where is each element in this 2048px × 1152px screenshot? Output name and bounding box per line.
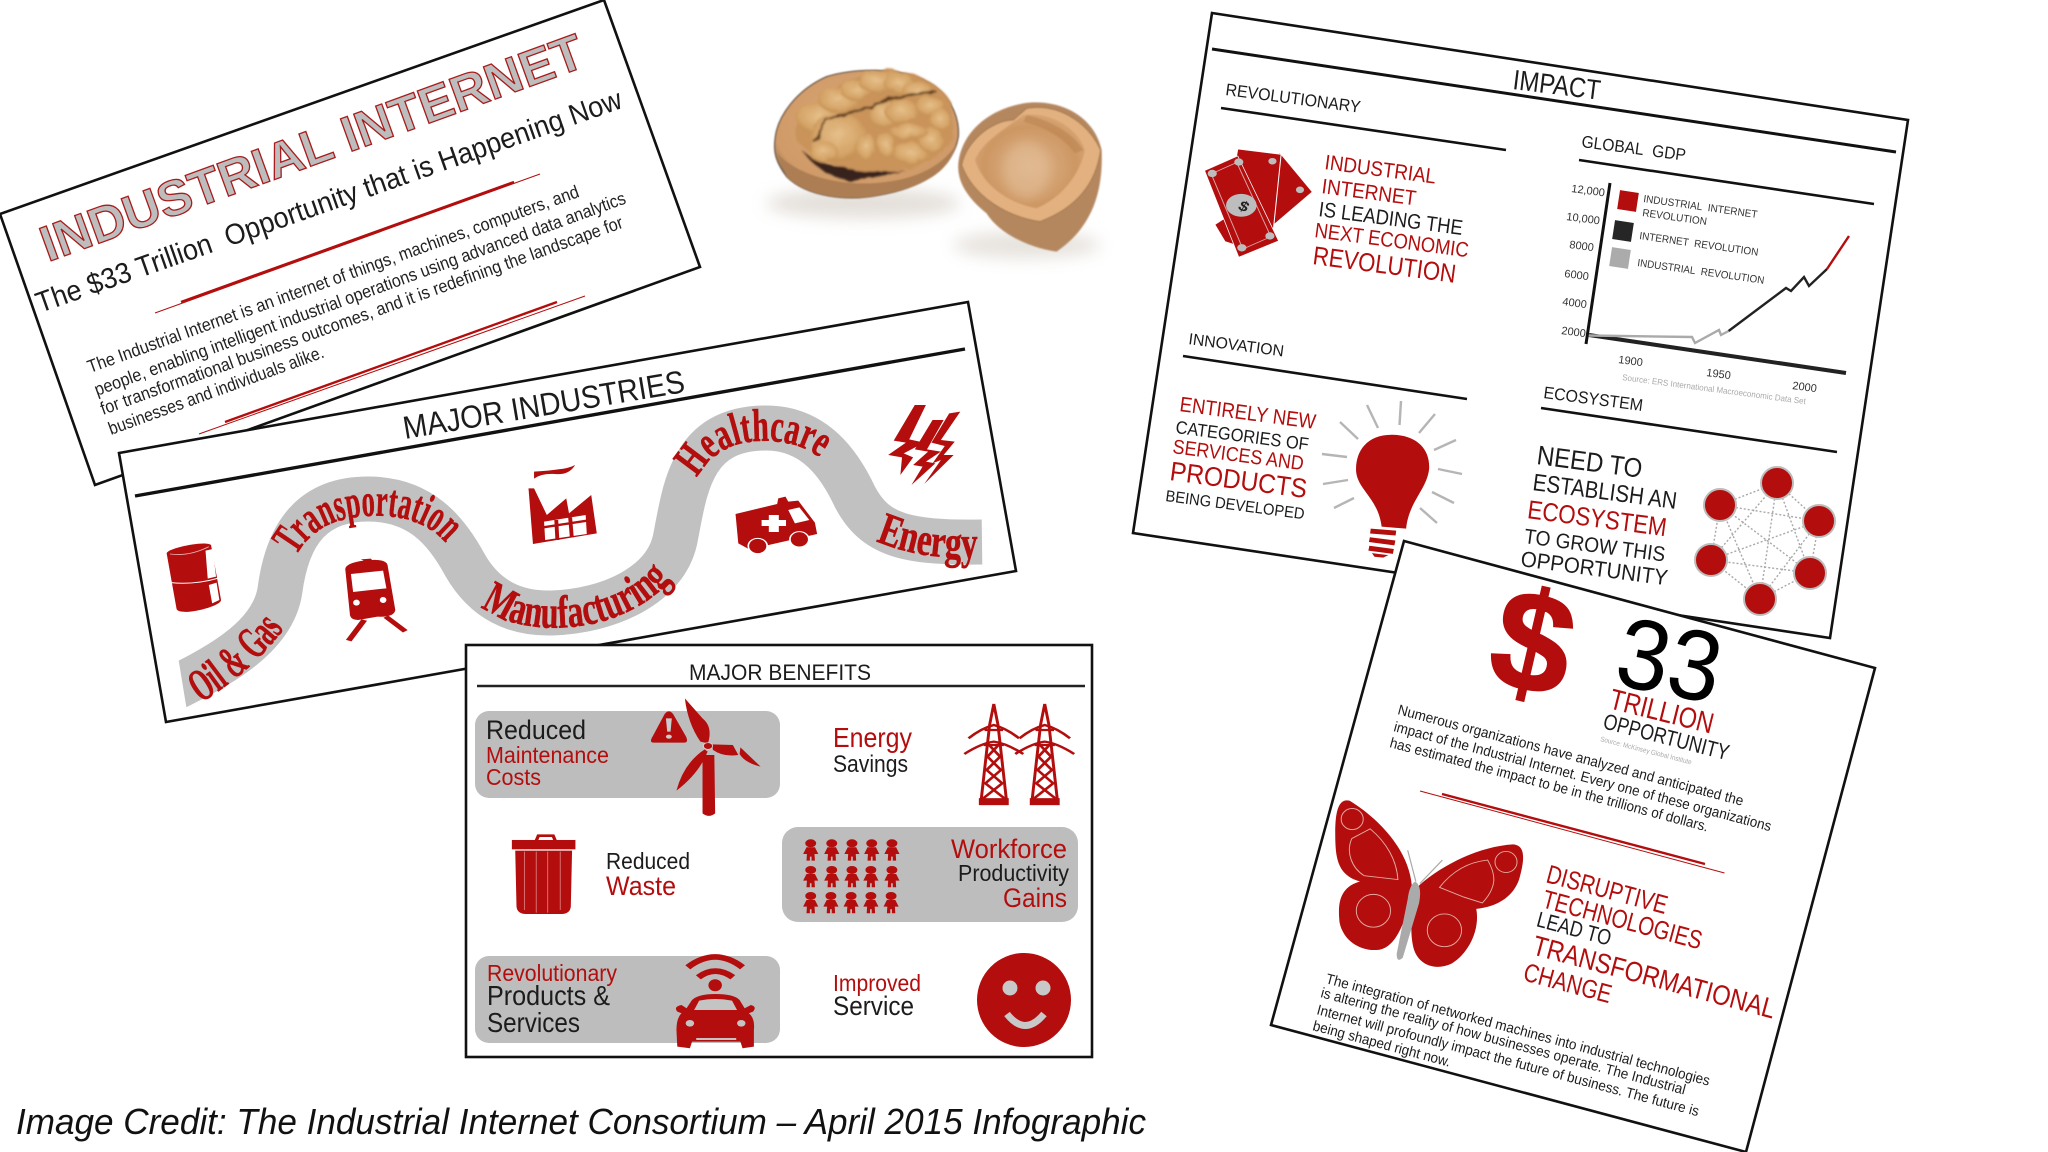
image: walnut <box>767 70 1102 258</box>
text: entirely new categories: PRODUCTS <box>1168 456 1309 504</box>
benefit box: revolutionary products and services: Products & <box>487 980 610 1011</box>
benefit box: reduced maintenance costs <box>475 711 780 798</box>
source note: Source: ERS International Macroeconomic Data Set <box>1622 372 1807 406</box>
text: disruptive technologies: DISRUPTIVE <box>1543 859 1671 920</box>
icon: lightning <box>888 405 960 485</box>
red rule <box>1420 791 1724 873</box>
stat label: TRILLION <box>1606 684 1717 740</box>
panel: major industries <box>118 300 1018 724</box>
paragraph: integration: is altering the reality of how businesses operate. The Industrial <box>1319 985 1687 1098</box>
text: need to establish an ecosystem <box>1519 440 1679 590</box>
legend: INTERNET REVOLUTION <box>1639 230 1759 259</box>
icon: money bills: $ <box>1235 199 1252 216</box>
icon: money bills <box>1205 149 1312 257</box>
icon: connected car <box>676 957 755 1048</box>
stat label <box>1599 684 1732 766</box>
y axis labels: 4000 <box>1562 296 1587 311</box>
text: entirely new categories: BEING DEVELOPED <box>1164 488 1305 523</box>
description text: people, enabling intelligent industrial operations using advanced data analytics <box>92 188 628 400</box>
icon: train <box>345 559 405 641</box>
icon: factory <box>529 465 597 544</box>
benefit: energy savings: Energy <box>833 722 912 753</box>
section: ecosystem: ECOSYSTEM <box>1542 383 1644 415</box>
text: leading the next economic revolution: INTERNET <box>1320 175 1418 210</box>
paragraph: integration: The integration of networked machines into industrial technologies <box>1324 971 1712 1090</box>
wave labels <box>189 408 978 700</box>
benefit box: reduced maintenance costs: Reduced <box>486 715 586 745</box>
x axis labels <box>1618 354 1817 395</box>
wave labels: Manufacturing <box>480 564 676 628</box>
x axis labels: 1950 <box>1706 367 1731 382</box>
icon: warning and wind turbine <box>651 698 761 816</box>
image credit: Image Credit: The Industrial Internet Consortium – April 2015 Infographic <box>16 1101 1146 1142</box>
gdp line <box>1589 236 1849 343</box>
section: ecosystem <box>1519 383 1837 615</box>
benefit box: revolutionary products and services: Services <box>487 1007 580 1038</box>
wave labels: Healthcare <box>672 408 830 478</box>
text: disruptive technologies <box>1520 859 1779 1025</box>
heading: major benefits: MAJOR BENEFITS <box>689 660 871 685</box>
stat: 33: 33 <box>1608 596 1731 725</box>
y axis labels: 8000 <box>1569 239 1594 254</box>
panel: 33 trillion opportunity <box>1271 541 1875 1152</box>
benefit box: workforce productivity gains: Productivity <box>958 860 1069 886</box>
x axis labels: 1900 <box>1618 354 1643 369</box>
benefit: reduced waste <box>606 848 690 901</box>
text: disruptive technologies: CHANGE <box>1520 957 1615 1009</box>
stat label: Source: McKinsey Global Institute <box>1599 736 1692 766</box>
legend <box>1609 190 1765 287</box>
text: disruptive technologies: LEAD TO <box>1534 907 1614 950</box>
upper red rule <box>155 174 540 313</box>
icon: trash can <box>512 836 575 914</box>
title: INDUSTRIAL INTERNET: INDUSTRIAL INTERNET <box>33 23 591 272</box>
text: leading the next economic revolution: REVOLUTION <box>1311 240 1458 289</box>
benefit: improved service: Improved <box>833 970 921 996</box>
benefit box: workforce productivity gains <box>782 827 1078 922</box>
icon: smiley <box>977 953 1071 1047</box>
panel: industrial internet title card <box>0 0 700 485</box>
heading: impact: IMPACT <box>1511 64 1602 106</box>
icon: butterfly <box>1335 800 1523 967</box>
y axis labels <box>1561 183 1606 340</box>
paragraph: organizations: impact of the Industrial Internet. Every one of these organizations <box>1392 719 1773 835</box>
paragraph: integration: being shaped right now. <box>1311 1018 1452 1071</box>
icon: dollar sign: $ <box>1477 556 1589 729</box>
paragraph: organizations: Numerous organizations have analyzed and anticipated the <box>1396 702 1745 810</box>
benefit box: revolutionary products and services <box>475 956 780 1043</box>
paragraph: integration: Internet will profoundly impact the future of business. The future is <box>1315 1002 1701 1120</box>
section: global gdp chart: GLOBAL GDP <box>1580 132 1687 165</box>
text: entirely new categories: SERVICES AND <box>1171 436 1305 475</box>
legend: INDUSTRIAL REVOLUTION <box>1637 257 1765 287</box>
icon: workforce people <box>803 839 900 913</box>
icon: oil barrel <box>167 543 221 612</box>
icon: power pylons <box>964 704 1074 804</box>
lower red rule <box>199 296 585 434</box>
description text: businesses and individuals alike. <box>106 342 327 439</box>
text: need to establish an ecosystem: TO GROW THIS <box>1523 525 1667 566</box>
text: need to establish an ecosystem: ESTABLISH AN <box>1531 469 1679 515</box>
benefit: improved service <box>833 970 921 1021</box>
benefit: energy savings <box>833 722 912 778</box>
heading: major industries: MAJOR INDUSTRIES <box>400 363 687 446</box>
benefit box: workforce productivity gains: Gains <box>1003 883 1067 913</box>
y axis labels: 2000 <box>1561 325 1586 340</box>
panel: major benefits <box>466 645 1092 1057</box>
text: leading the next economic revolution <box>1311 151 1470 289</box>
section: global gdp chart <box>1561 132 1874 406</box>
legend: INDUSTRIAL INTERNET <box>1643 193 1759 221</box>
text: entirely new categories <box>1164 393 1317 523</box>
section: revolutionary <box>1205 80 1506 289</box>
icon: network of nodes <box>1695 467 1835 615</box>
paragraph: organizations: has estimated the impact to be in the trillions of dollars. <box>1388 735 1710 835</box>
text: disruptive technologies: TRANSFORMATIONAL <box>1529 930 1779 1025</box>
section: innovation: INNOVATION <box>1187 331 1285 360</box>
wave road <box>150 428 982 700</box>
benefit: reduced waste: Waste <box>606 871 676 901</box>
text: entirely new categories: CATEGORIES OF <box>1174 417 1310 454</box>
x axis labels: 2000 <box>1792 380 1817 395</box>
description text: for transformational business outcomes, and it is redefining the landscape for <box>98 212 626 419</box>
description text: The Industrial Internet is an internet of things, machines, computers, and <box>85 181 582 377</box>
text: disruptive technologies: TECHNOLOGIES <box>1539 884 1706 955</box>
stat label: OPPORTUNITY <box>1601 709 1732 765</box>
wave labels: Oil & Gas <box>189 616 282 700</box>
section: innovation <box>1164 331 1467 558</box>
y axis labels: 6000 <box>1564 268 1589 283</box>
wave labels: Energy <box>876 512 978 568</box>
icon: light bulb <box>1322 401 1462 558</box>
benefit box: workforce productivity gains: Workforce <box>951 834 1067 864</box>
panel: impact <box>1133 13 1908 638</box>
text: leading the next economic revolution: INDUSTRIAL <box>1323 151 1437 189</box>
text: need to establish an ecosystem: OPPORTUNITY <box>1519 546 1670 590</box>
benefit box: reduced maintenance costs: Maintenance <box>486 742 609 768</box>
benefit box: reduced maintenance costs: Costs <box>486 764 541 790</box>
y axis labels: 10,000 <box>1566 211 1601 227</box>
icon: ambulance <box>736 497 817 554</box>
legend: REVOLUTION <box>1642 207 1708 228</box>
benefit box: revolutionary products and services: Revolutionary <box>487 960 617 986</box>
section: revolutionary: REVOLUTIONARY <box>1224 80 1362 117</box>
benefit: reduced waste: Reduced <box>606 848 690 874</box>
text: leading the next economic revolution: NEXT ECONOMIC <box>1313 219 1470 262</box>
subtitle: The $33 Trillion Opportunity that is Happening Now <box>32 83 627 320</box>
text: need to establish an ecosystem: NEED TO <box>1535 440 1644 484</box>
benefit: energy savings: Savings <box>833 751 908 778</box>
wave labels: Transportation <box>270 490 458 553</box>
text: need to establish an ecosystem: ECOSYSTEM <box>1526 494 1669 542</box>
text: leading the next economic revolution: IS LEADING THE <box>1317 198 1464 240</box>
text: entirely new categories: ENTIRELY NEW <box>1178 393 1317 434</box>
y axis labels: 12,000 <box>1571 183 1606 199</box>
benefit: improved service: Service <box>833 991 914 1021</box>
